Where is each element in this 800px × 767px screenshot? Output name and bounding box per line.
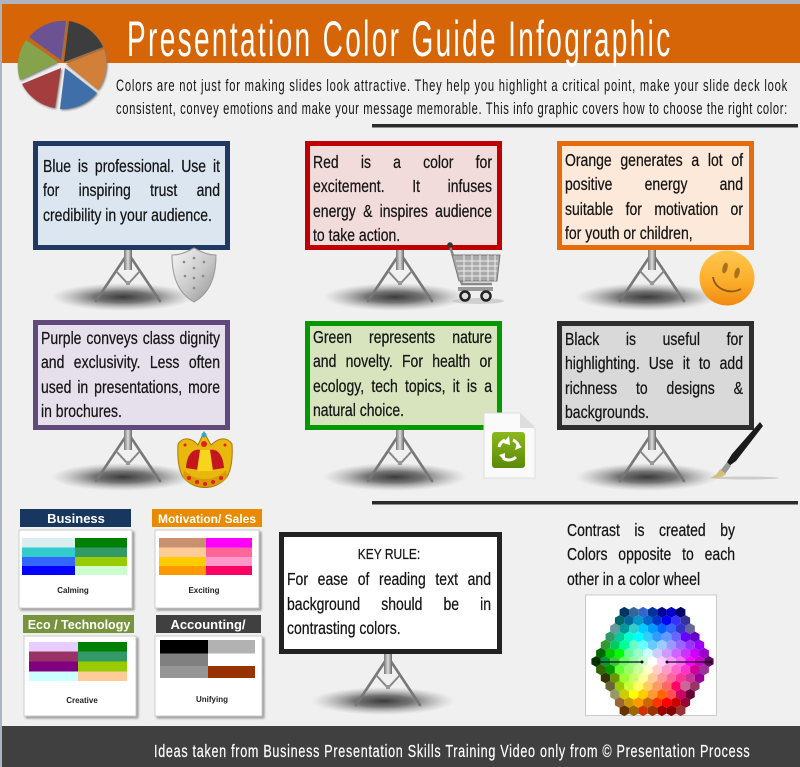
panel: purple: Purple conveys class dignity xyxy=(41,328,220,348)
card: Accounting swatches: Unifying xyxy=(196,695,228,704)
panel: red xyxy=(308,144,500,311)
contrast text xyxy=(567,518,735,592)
contrast text: Colors opposite to each xyxy=(567,544,735,564)
panel: orange: suitable for motivation or xyxy=(565,199,743,219)
panel: key rule: For ease of reading text and xyxy=(287,569,491,589)
card: Accounting swatches xyxy=(155,636,262,716)
header: Eco / Technology: Eco / Technology xyxy=(28,618,130,632)
panel: green: natural choice. xyxy=(313,400,404,420)
header band xyxy=(2,4,800,63)
panel: black: highlighting. Use it to add xyxy=(565,353,743,373)
panel: black: richness to designs & xyxy=(565,378,743,398)
panel: blue: credibility in your audience. xyxy=(43,205,212,225)
panel: green: Green represents nature xyxy=(313,327,492,347)
contrast text: other in a color wheel xyxy=(567,569,700,589)
panel: orange: Orange generates a lot of xyxy=(565,150,743,170)
header: Motivation xyxy=(152,509,262,527)
panel: purple: used in presentations, more xyxy=(41,377,220,397)
icon: recycle document xyxy=(484,413,535,478)
card: Business swatches xyxy=(19,530,132,608)
icon: smiley xyxy=(700,250,754,306)
intro text: consistent, convey emotions and make your message memorable. This info graphic covers how to choose the right color: xyxy=(116,100,787,119)
panel: black xyxy=(560,324,752,491)
icon: shield xyxy=(172,248,216,302)
panel: green: ecology, tech topics, it is a xyxy=(313,376,492,396)
panel: purple xyxy=(36,322,228,491)
panel: red: energy & inspires audience xyxy=(313,201,492,221)
header: Business xyxy=(20,509,131,527)
panel: purple: and exclusivity. Less often xyxy=(41,352,220,372)
card: Eco swatches: Creative xyxy=(66,696,98,705)
panel: blue xyxy=(36,144,228,311)
panel: green: and novelty. For health or xyxy=(313,351,492,371)
panel: black: Black is useful for xyxy=(565,329,743,349)
panel: blue: for inspiring trust and xyxy=(43,180,220,200)
icon: paint brush xyxy=(710,422,779,480)
panel: red: Red is a color for xyxy=(313,152,492,172)
title: Presentation Color Guide Infographic xyxy=(127,10,670,67)
panel: key rule: background should be in xyxy=(287,594,491,614)
intro text xyxy=(116,77,788,119)
divider bar top xyxy=(372,124,798,128)
divider bar middle xyxy=(372,501,798,504)
panel: black: backgrounds. xyxy=(565,402,649,422)
header: Motivation: Motivation/ Sales xyxy=(158,512,256,526)
color wheel xyxy=(586,595,716,716)
footer text: Ideas taken from Business Presentation Skills Training Video only from © Presentation Process xyxy=(154,742,750,762)
panel: orange: positive energy and xyxy=(565,174,743,194)
panel: key rule xyxy=(282,534,500,715)
icon: pie chart logo xyxy=(18,21,106,109)
card: Motivation swatches xyxy=(155,530,259,608)
panel: key rule: contrasting colors. xyxy=(287,618,401,638)
panel: red: excitement. It infuses xyxy=(313,176,492,196)
panel: orange: for youth or children, xyxy=(565,223,693,243)
panel: blue: Blue is professional. Use it xyxy=(43,156,220,176)
header: Accounting: Accounting/ xyxy=(170,617,246,632)
intro text: Colors are not just for making slides look attractive. They help you highlight a critical point, make your slide deck look xyxy=(116,77,788,96)
panel: red: to take action. xyxy=(313,225,400,245)
panel: orange xyxy=(560,144,752,311)
icon: crown xyxy=(178,432,232,488)
card: Business swatches: Calming xyxy=(57,586,89,595)
icon: shopping cart xyxy=(447,242,504,304)
card: Eco swatches xyxy=(24,636,136,716)
panel: purple: in brochures. xyxy=(41,401,122,421)
contrast text: Contrast is created by xyxy=(567,520,735,540)
panel: green xyxy=(308,324,500,491)
header: Accounting xyxy=(156,615,261,633)
card: Motivation swatches: Exciting xyxy=(188,586,220,595)
header: Business: Business xyxy=(47,511,105,526)
panel: key rule: KEY RULE: xyxy=(358,546,420,563)
footer bar xyxy=(2,726,800,767)
